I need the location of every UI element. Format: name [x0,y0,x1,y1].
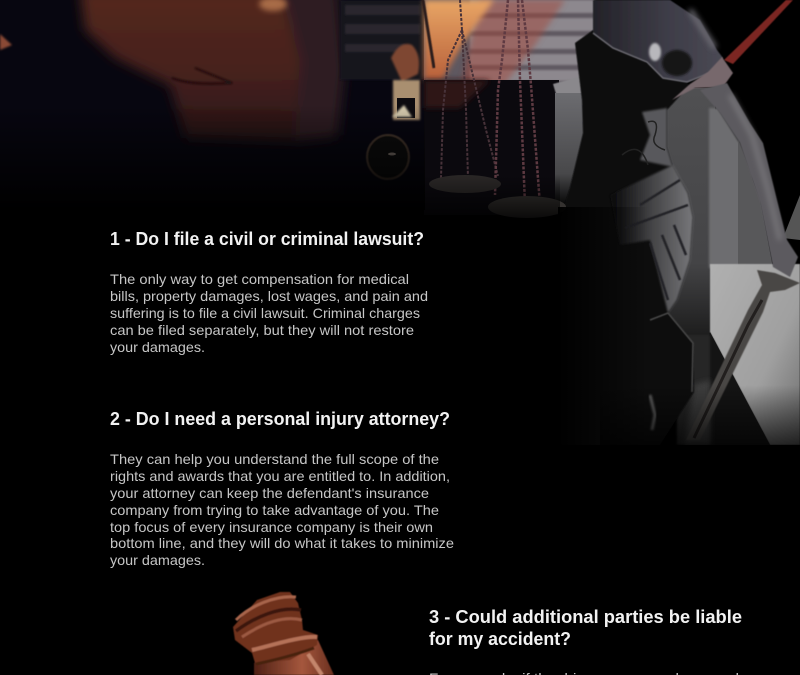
photo: back wall [660,0,800,445]
text: answer 1 [110,271,428,355]
text: answer 2: They can help you understand the full scope of the [110,451,439,467]
question 1 block [110,229,428,355]
text: answer 2: bottom line, and they will do what it takes to minimize [110,535,454,551]
text: answer 2: rights and awards that you are entitled to. In addition, [110,468,450,484]
statue body [520,30,694,445]
heading: question 3: for my accident? [429,629,571,649]
icon: gavel [233,592,334,675]
text: answer 2: your attorney can keep the defendant's insurance [110,485,429,501]
text: answer 1: suffering is to file a civil lawsuit. Criminal charges [110,305,420,321]
text: answer 2: your damages. [110,552,205,568]
text: answer 2: top focus of every insurance company is their own [110,519,433,535]
text: answer 1: your damages. [110,339,205,355]
heading: question 3: 3 - Could additional parties be liable [429,607,742,627]
text: answer 1: The only way to get compensation for medical [110,271,409,287]
heading: question 3 [429,607,742,649]
photo: blurred figure in red light [0,0,425,210]
scale pans [429,175,501,193]
text: answer 2 [110,451,454,568]
statue waist [640,108,673,167]
statue arm [700,83,798,277]
sword [686,270,800,440]
statue of justice [520,0,800,445]
statue sleeve [672,57,733,100]
heading: question 2: 2 - Do I need a personal injury attorney? [110,409,450,429]
photo: blinds and window [340,0,595,90]
photo: dark cabinet with scales behind [424,76,585,215]
question 3 block [429,607,742,675]
statue chest [593,0,723,82]
question 2 block [110,409,454,568]
heading: question 1: 1 - Do I file a civil or criminal lawsuit? [110,229,424,249]
scale chains left [441,0,498,178]
scale chains right [495,0,540,205]
text: answer 1: bills, property damages, lost wages, and pain and [110,288,428,304]
text: answer 1: can be filed separately, but they will not restore [110,322,414,338]
scales of justice [429,0,566,218]
statue hip drapery [610,165,693,313]
text: answer 2: company from trying to take advantage of you. The [110,502,439,518]
photo: desk ornaments and lens [367,44,420,179]
